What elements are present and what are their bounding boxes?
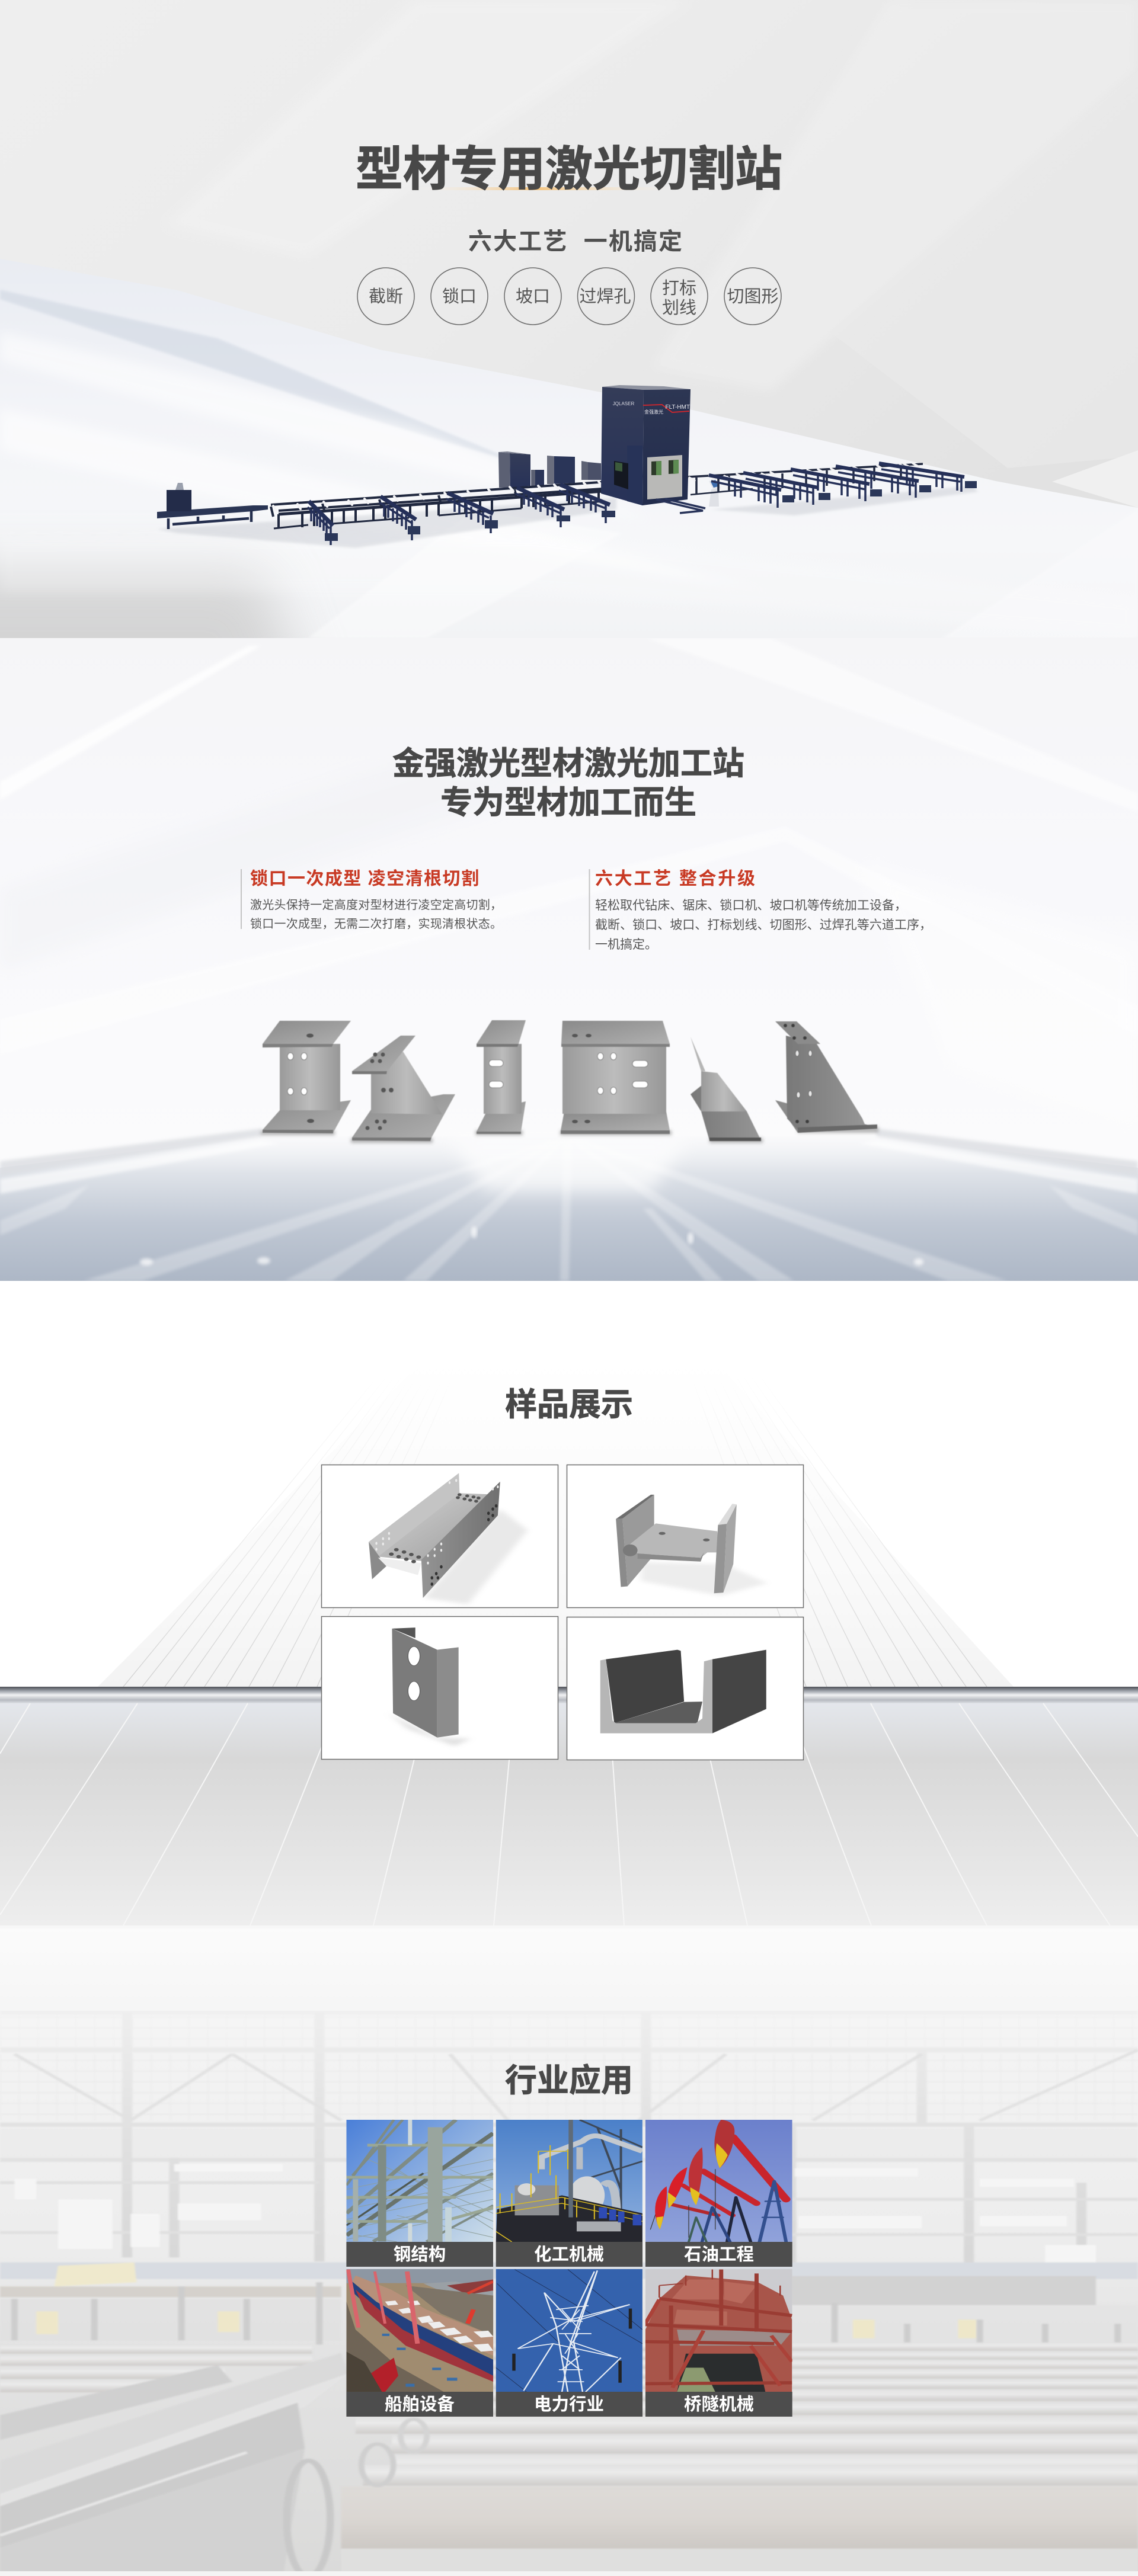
label text: 化工机械 <box>534 2245 604 2264</box>
steel pipes right <box>341 2343 1138 2576</box>
left roller tables <box>271 481 628 528</box>
photo: power tower <box>496 2269 642 2392</box>
main tower: FLT-HMT1 <box>665 404 693 411</box>
feature: coping cut: 锁口一次成型，无需二次打磨，实现清根状态。 <box>250 917 502 931</box>
sample card: H section <box>567 1465 804 1608</box>
label text: 桥隧机械 <box>684 2395 754 2414</box>
photo: shipyard <box>346 2269 493 2392</box>
feature: coping cut <box>241 869 502 931</box>
main tower: 金强激光 <box>644 409 663 415</box>
process circles <box>357 268 781 325</box>
process labels <box>369 278 779 318</box>
steel pipes left <box>0 2344 427 2576</box>
background: rays and floor <box>0 1281 1138 1928</box>
panel: samples <box>0 1387 1138 1925</box>
photo: pumpjacks <box>645 2120 792 2242</box>
factory windows <box>14 2164 1096 2270</box>
process labels: 过焊孔 <box>579 287 631 306</box>
process labels: 坡口 <box>516 287 550 306</box>
right transfer arms <box>709 463 964 508</box>
process labels: 划线 <box>662 298 696 318</box>
label text: 电力行业 <box>534 2395 604 2414</box>
feature: coping cut: 锁口一次成型 凌空清根切割 <box>250 869 479 889</box>
photo: tunnel machine <box>645 2269 792 2392</box>
heading: 样品展示 <box>505 1387 633 1422</box>
machine: laser cutting station <box>157 385 978 548</box>
background: light rays <box>0 638 1138 1281</box>
sample card: channel with holes <box>321 1465 558 1608</box>
floor shadows <box>157 486 978 548</box>
label text: 船舶设备 <box>385 2395 455 2414</box>
floor with light streaks <box>0 1129 1138 1281</box>
part: tapered bracket <box>775 1021 877 1133</box>
factory roof trusses <box>0 2013 1138 2270</box>
photo: chemical plant <box>496 2120 642 2242</box>
feeder unit <box>157 483 268 529</box>
feature: coping cut: 激光头保持一定高度对型材进行凌空定高切割， <box>250 898 502 912</box>
sample card: angle with holes <box>321 1616 558 1760</box>
panel: product advantages <box>0 638 1138 1281</box>
photo: steel structure <box>346 2120 493 2242</box>
label text <box>385 2245 754 2414</box>
machine bed band <box>0 2263 1138 2348</box>
sample card: U channel <box>567 1617 804 1760</box>
main tower: JQLASER <box>613 401 634 406</box>
panel: industry applications <box>0 1992 1138 2576</box>
subtitle: 六大工艺 一机搞定 <box>468 229 682 255</box>
label text: 钢结构 <box>394 2245 446 2264</box>
parts row <box>261 1020 878 1143</box>
right roller tables <box>688 464 923 495</box>
panel: hero <box>0 0 1138 638</box>
part shadows <box>261 1127 878 1143</box>
feature: six processes <box>589 869 932 951</box>
heading: 专为型材加工而生 <box>440 785 696 821</box>
feature: six processes: 一机搞定。 <box>595 938 657 951</box>
label text: 石油工程 <box>684 2245 754 2264</box>
part: wide web <box>561 1021 670 1134</box>
left transfer arms <box>308 485 610 545</box>
rollers <box>273 482 602 511</box>
track and control kiosk <box>656 479 721 513</box>
label bars <box>346 2242 792 2417</box>
part: gusset <box>691 1037 761 1141</box>
process labels: 打标 <box>662 278 696 298</box>
feature: six processes: 截断、锁口、坡口、打标划线、切图形、过焊孔等六道工序， <box>595 918 932 932</box>
process labels: 切图形 <box>727 287 779 306</box>
background: faded factory photo <box>0 1925 1138 2576</box>
part: I-beam <box>263 1021 351 1133</box>
application grid <box>346 2120 792 2417</box>
heading <box>392 746 744 821</box>
back cabinets <box>498 451 601 488</box>
background: gray field and white wedge <box>0 0 1138 770</box>
main tower <box>601 385 693 505</box>
heading: 行业应用 <box>505 2063 633 2098</box>
feature: six processes: 轻松取代钻床、锯床、锁口机、坡口机等传统加工设备， <box>595 899 907 912</box>
feature: six processes: 六大工艺 整合升级 <box>595 869 755 889</box>
process labels: 截断 <box>369 287 403 306</box>
process labels: 锁口 <box>442 287 477 306</box>
part: angled bracket <box>352 1036 455 1141</box>
part: narrow channel <box>477 1020 526 1134</box>
title: 型材专用激光切割站 <box>356 143 782 196</box>
right rollers <box>689 463 918 480</box>
heading: 金强激光型材激光加工站 <box>392 746 744 781</box>
